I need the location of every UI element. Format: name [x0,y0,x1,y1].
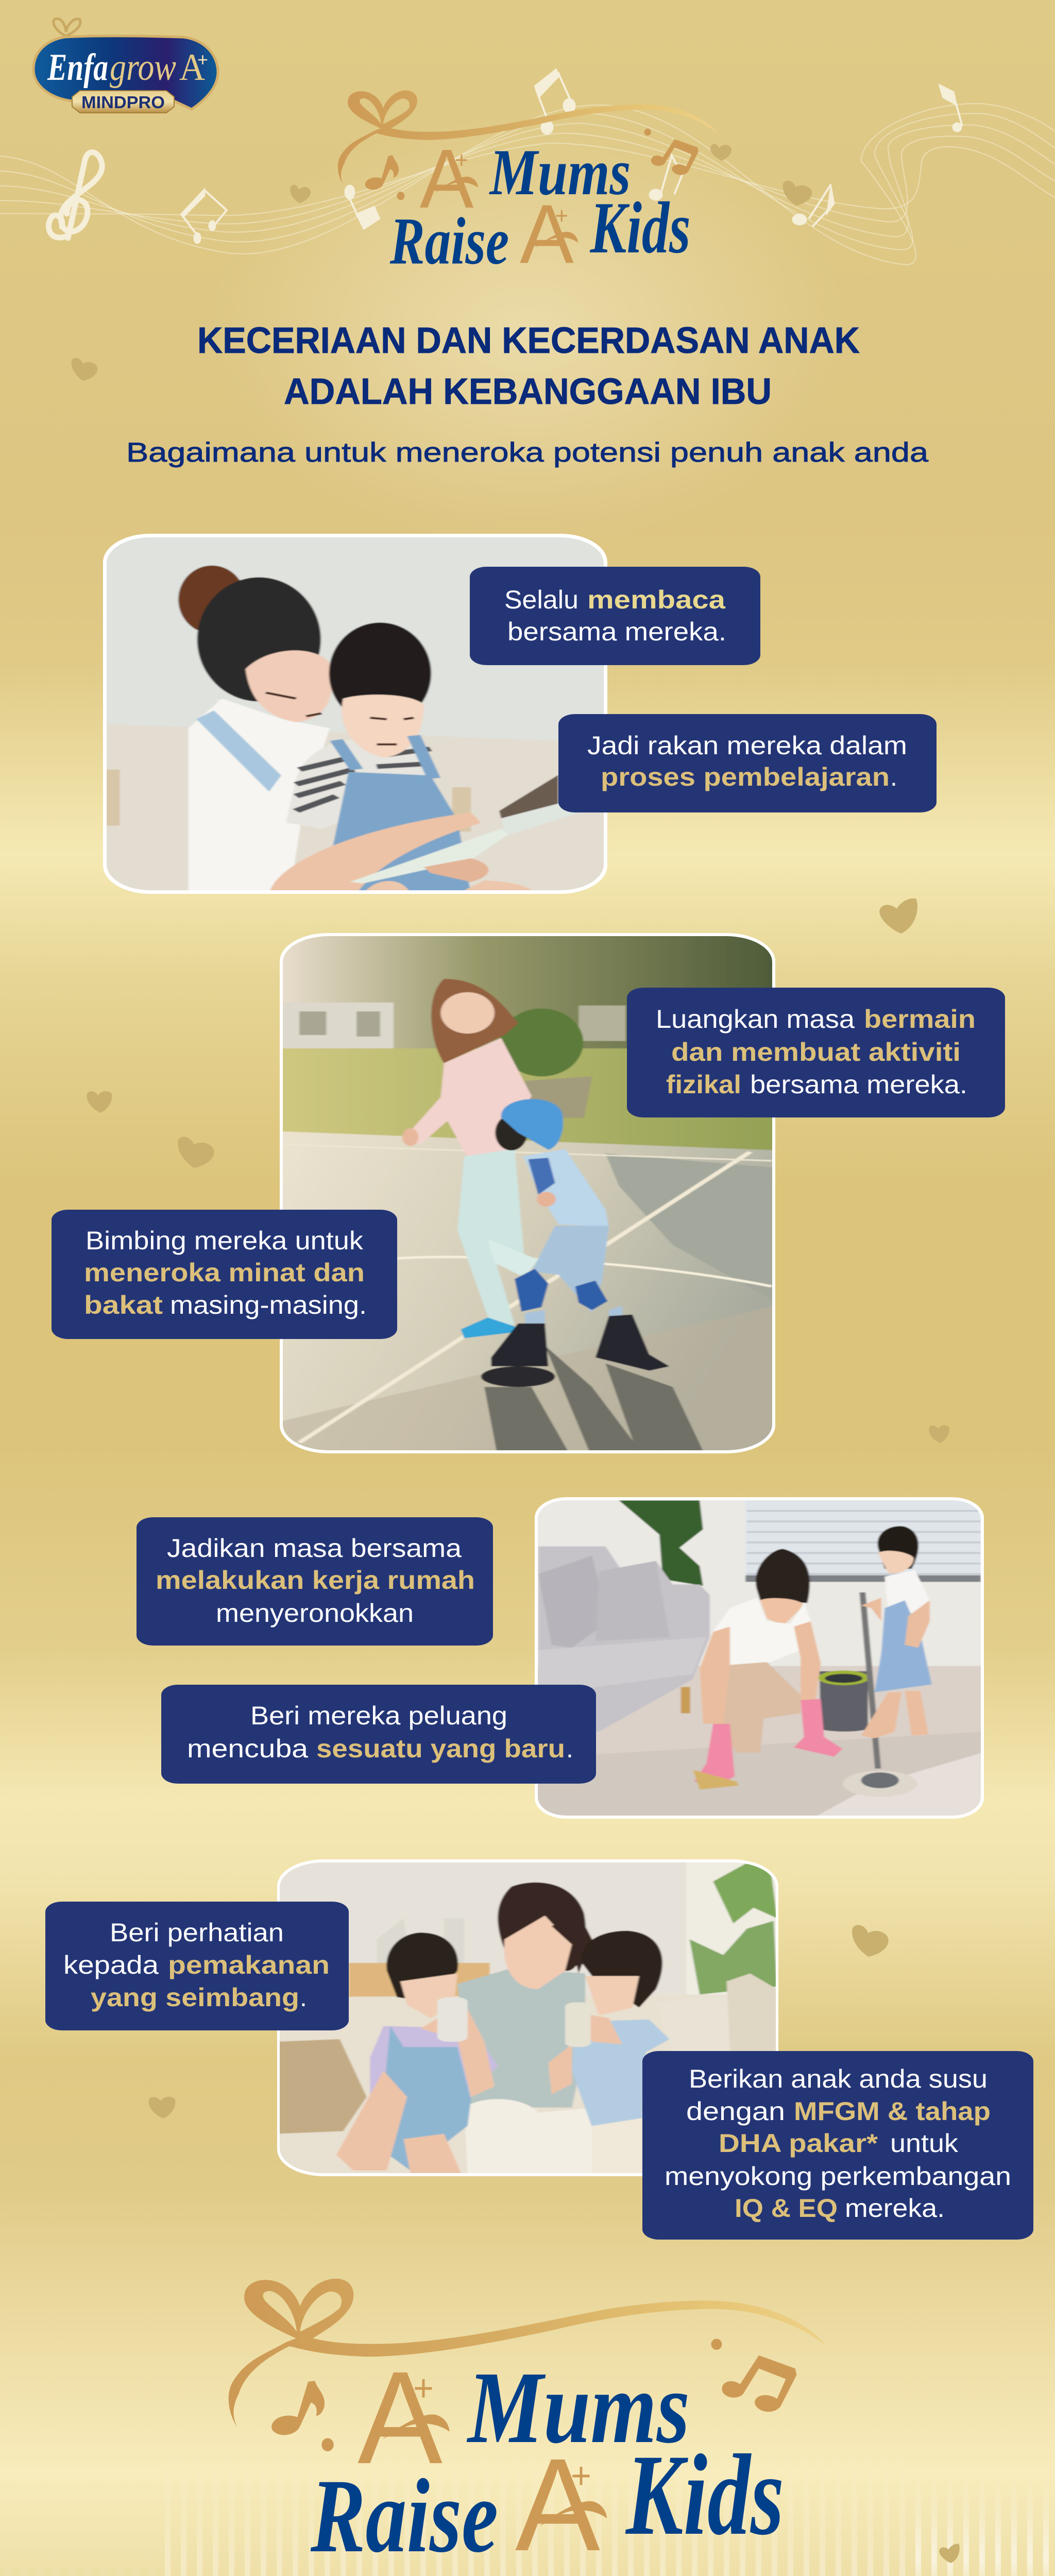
callout: pemakanan seimbang: kepada [63,1951,159,1979]
callout: bermain: bersama mereka. [750,1070,967,1099]
callout: proses pembelajaran [558,714,937,812]
A mark 1: A [420,132,474,226]
callout: sesuatu yang baru: sesuatu yang baru [316,1734,565,1763]
callout: bermain: dan membuat aktiviti [671,1038,961,1066]
callout: MFGM and DHA: menyokong perkembangan [665,2162,1011,2191]
heading line 1: KECERIAAN DAN KECERDASAN ANAK [197,320,860,361]
callout: sesuatu yang baru: . [566,1734,573,1763]
word Mums: Mums [467,2351,690,2465]
note dot right [711,2339,722,2350]
callout: sesuatu yang baru: Beri mereka peluang [250,1701,507,1730]
A mark 1: A [358,2344,443,2492]
callout: minat dan bakat: masing-masing. [170,1291,367,1319]
note dot [321,2438,334,2451]
heading [197,320,860,412]
callout: pemakanan seimbang: pemakanan [168,1951,330,1979]
panel: reading together [94,530,937,896]
note dot right [644,129,651,135]
callout: minat dan bakat: meneroka minat dan [84,1258,365,1287]
callout: pemakanan seimbang: yang seimbang [91,1983,299,2012]
word Raise: Raise [389,205,509,279]
A swoosh [382,2414,449,2439]
plus 1: + [455,147,468,173]
callout: bermain [627,988,1005,1117]
A mark 2: A [515,2431,600,2576]
callout: MFGM and DHA: MFGM & tahap [794,2097,991,2126]
panel: housework [137,1495,989,1821]
callout: proses pembelajaran: proses pembelajaran [601,762,890,791]
callout: membaca [470,567,760,665]
callout: kerja rumah [137,1517,493,1646]
brand logo: Enfagrow A+ Mindpro [33,19,218,113]
callout: membaca: bersama mereka. [507,617,726,646]
photo: mother and child rollerblading [276,928,780,1458]
note left [365,155,399,190]
callout: MFGM and DHA: untuk [890,2129,959,2158]
callout: MFGM and DHA: mereka. [845,2194,945,2223]
callout: membaca: Selalu [504,585,578,614]
callout: sesuatu yang baru: mencuba [187,1734,308,1763]
logo pill [72,91,174,113]
A swoosh [435,177,478,193]
A swoosh 2 [535,232,578,248]
callout: MFGM and DHA [642,2051,1033,2240]
A swoosh 2 [539,2501,607,2526]
photo: mother and two children drinking milk [269,1858,787,2178]
callout: MFGM and DHA: IQ & EQ [735,2194,838,2223]
campaign logo bottom: A+ Mums Raise A+ Kids [229,2279,826,2576]
callout: MFGM and DHA: dengan [686,2097,785,2126]
callout: bermain: fizikal [666,1070,741,1099]
A mark 2: A [520,188,574,281]
subheading: Bagaimana untuk meneroka potensi penuh anak anda [126,437,929,468]
icon: treble clef top [49,152,102,238]
callout: MFGM and DHA: Berikan anak anda susu [689,2064,988,2093]
ribbon [338,90,717,248]
logo shield [33,36,218,109]
callout: minat dan bakat: bakat [84,1291,163,1319]
callout: sesuatu yang baru [161,1685,596,1784]
plus 2: + [571,2455,591,2497]
logo mindpro: MINDPRO [81,93,165,112]
panel: play and hobbies [52,928,1005,1458]
callout: proses pembelajaran: Jadi rakan mereka dalam [587,731,907,760]
logo A plus: A [179,46,205,89]
heading line 2: ADALAH KEBANGGAAN IBU [284,371,772,412]
note right [722,2355,796,2412]
word Mums: Mums [489,137,631,209]
callout: kerja rumah: menyeronokkan [216,1599,414,1628]
callout: minat dan bakat [52,1210,397,1339]
plus 2: + [555,202,568,229]
callout: kerja rumah: Jadikan masa bersama [167,1534,462,1563]
photo: mother reading with child [94,530,619,896]
icon: music notes top [180,69,962,244]
logo wordmark: Enfa: Enfa [47,46,108,89]
word Kids: Kids [589,187,690,268]
ribbon [229,2279,826,2526]
callout: bermain: Luangkan masa [656,1005,855,1033]
hearts [71,144,960,2576]
panel: nutrition [45,1858,1033,2240]
callout: pemakanan seimbang [45,1902,349,2030]
plus 1: + [413,2368,434,2409]
callout: bermain: bermain [864,1005,976,1033]
word Raise: Raise [310,2458,498,2574]
callout: minat dan bakat: Bimbing mereka untuk [86,1226,364,1255]
word Kids: Kids [625,2430,784,2559]
logo bow [54,19,80,36]
callout: pemakanan seimbang: Beri perhatian [110,1918,284,1947]
note dot [397,192,404,200]
logo plus: + [197,49,208,70]
campaign logo top: A+ Mums Raise A+ Kids [338,90,717,281]
photo: mother and child cleaning [532,1495,989,1821]
decorative music staff: top [0,104,1055,265]
callout: MFGM and DHA: DHA pakar* [719,2129,878,2158]
logo wordmark: grow: grow [110,46,176,89]
callout: membaca: membaca [587,585,726,614]
callout: pemakanan seimbang: . [300,1983,307,2012]
note left [271,2381,325,2435]
callout: proses pembelajaran: . [890,762,897,791]
callout: kerja rumah: melakukan kerja rumah [156,1566,475,1595]
note right [651,139,699,175]
